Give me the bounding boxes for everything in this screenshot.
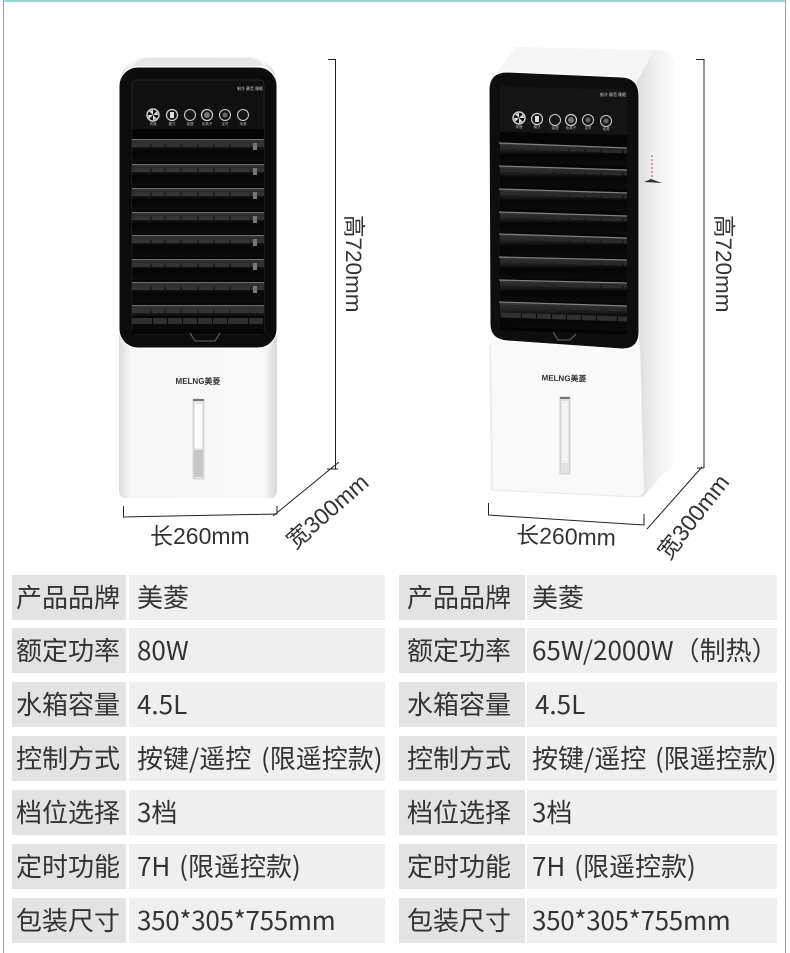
value: brand (527, 575, 777, 620)
panel label: 制冷 静音 睡眠 (600, 91, 626, 97)
row: water tank (399, 682, 525, 727)
button captions (150, 121, 247, 126)
water window (193, 399, 204, 479)
value: timer (527, 844, 777, 889)
button captions (516, 124, 610, 131)
right width label: 宽300mm (652, 470, 734, 564)
row: brand: 产品品牌 (16, 578, 120, 615)
value: speed: 3档 (532, 793, 572, 830)
row: brand (399, 575, 525, 620)
front face (490, 340, 644, 497)
value: power (129, 628, 385, 673)
row: water tank: 水箱容量 (407, 685, 511, 722)
side switch (644, 155, 662, 183)
row: control: 控制方式 (16, 739, 120, 776)
right length label: 长260mm (516, 522, 616, 551)
value: water tank: 4.5L (535, 685, 585, 722)
top cap highlight (132, 58, 265, 66)
fan icon (514, 113, 524, 123)
row: package: 包装尺寸 (16, 901, 120, 938)
value: brand (129, 575, 385, 620)
row: power: 额定功率 (16, 631, 120, 668)
left dimension lines (124, 60, 339, 517)
row: package (399, 898, 525, 943)
button captions: 定时 (584, 125, 592, 130)
value: water tank (129, 682, 385, 727)
button captions: 摇摆 (186, 121, 194, 126)
value: timer (129, 844, 385, 889)
button captions: 电源 (240, 121, 247, 126)
row: brand: 产品品牌 (407, 578, 511, 615)
black panel (489, 72, 639, 349)
button captions: 风速 (516, 124, 523, 129)
button captions: 电源 (602, 126, 610, 131)
row: timer (399, 844, 525, 889)
row: timer: 定时功能 (16, 847, 120, 884)
right air cooler (489, 47, 675, 497)
row: speed: 档位选择 (407, 793, 511, 830)
value: speed (527, 790, 777, 835)
row: speed: 档位选择 (16, 793, 120, 830)
value: timer: 7H (限遥控款) (137, 847, 301, 884)
left length label: 长260mm (150, 523, 250, 549)
water window (560, 397, 570, 474)
value: package: 350*305*755mm (532, 901, 730, 938)
row: power: 额定功率 (407, 631, 511, 668)
row: timer: 定时功能 (407, 847, 511, 884)
value: water tank (527, 682, 777, 727)
panel label: 制冷 静音 睡眠 (237, 85, 263, 91)
left width label: 宽300mm (281, 469, 374, 554)
row: speed (399, 790, 525, 835)
value: package: 350*305*755mm (137, 901, 335, 938)
brand logo: MELNG美菱 (542, 372, 587, 384)
button captions: 模式 (168, 121, 176, 126)
left height label: 高720mm (341, 215, 366, 313)
louvres (132, 129, 264, 341)
control buttons (147, 109, 248, 121)
button captions: 模式 (534, 124, 541, 129)
value: package (527, 898, 777, 943)
left air cooler (119, 57, 277, 498)
button captions: 负离子 (566, 125, 577, 130)
fan icon (148, 110, 158, 120)
value: speed: 3档 (137, 793, 177, 830)
value: package (129, 898, 385, 943)
value: speed (129, 790, 385, 835)
value: timer: 7H (限遥控款) (532, 847, 696, 884)
body (119, 57, 277, 498)
button captions: 风速 (150, 121, 157, 126)
button captions: 摇摆 (552, 125, 559, 130)
control buttons (513, 112, 612, 126)
row: control (399, 736, 525, 781)
black panel (119, 67, 277, 348)
row: package: 包装尺寸 (407, 901, 511, 938)
value: power: 65W/2000W（制热） (532, 631, 778, 668)
top face (489, 47, 675, 92)
row: power (399, 628, 525, 673)
button captions: 负离子 (202, 121, 213, 126)
louvres (499, 132, 627, 340)
spec table: left (12, 575, 385, 943)
value: brand: 美菱 (532, 578, 584, 615)
right dimension lines (488, 60, 704, 529)
row: water tank: 水箱容量 (16, 685, 120, 722)
value: control: 按键/遥控 (限遥控款) (137, 739, 383, 776)
value: control: 按键/遥控 (限遥控款) (532, 739, 777, 776)
button captions: 定时 (222, 121, 229, 126)
side face (636, 50, 675, 497)
value: brand: 美菱 (137, 578, 189, 615)
value: power: 80W (137, 631, 189, 668)
right height label: 高720mm (711, 215, 736, 313)
brand logo: MELNG美菱 (176, 376, 220, 386)
row: control: 控制方式 (407, 739, 511, 776)
value: water tank: 4.5L (137, 685, 187, 722)
